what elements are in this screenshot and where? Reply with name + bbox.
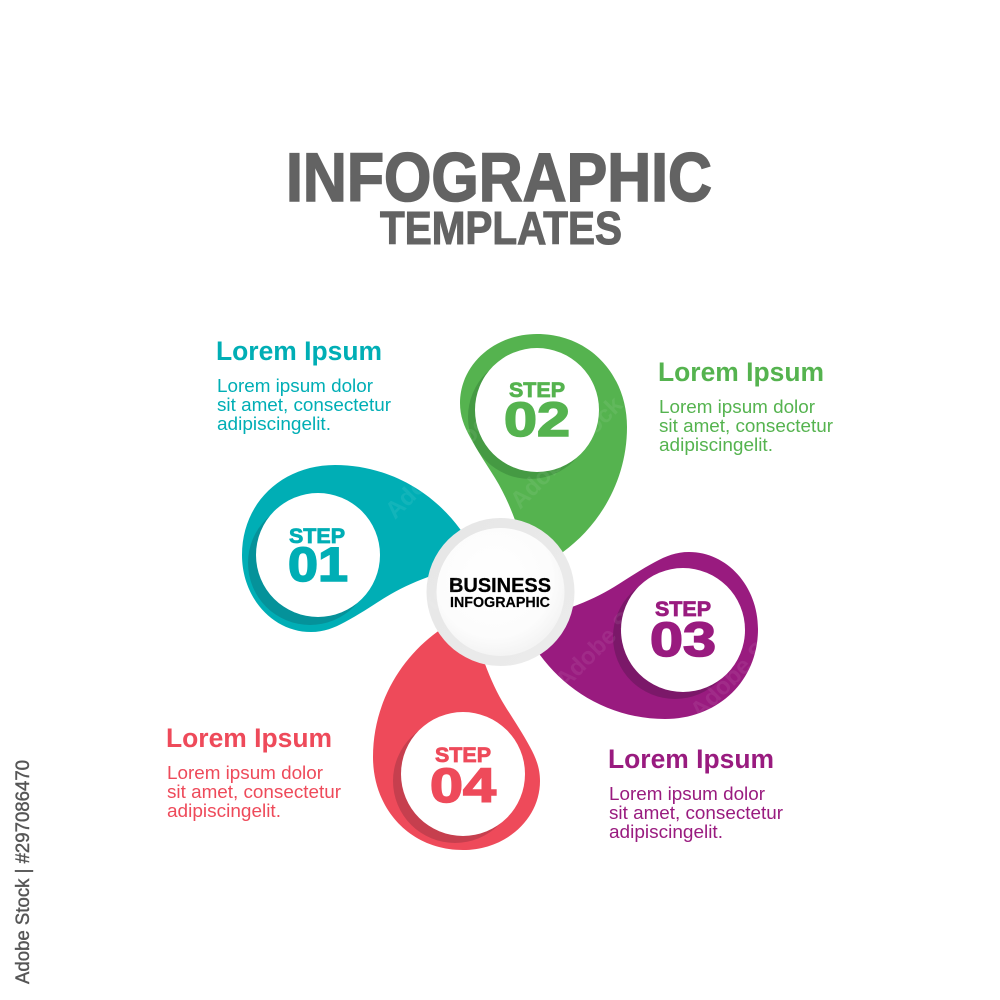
watermark: Adobe Stock bbox=[505, 391, 628, 514]
text block: step 01: sit amet, consectetur bbox=[217, 394, 391, 415]
text block: step 02 bbox=[658, 357, 833, 455]
petal: step 03: STEP bbox=[655, 597, 711, 621]
petal: step 01: 01 bbox=[288, 539, 348, 592]
text block: step 02: Lorem Ipsum bbox=[658, 357, 824, 387]
text block: step 04: Lorem Ipsum bbox=[166, 723, 332, 753]
petal: step 04: STEP bbox=[435, 743, 491, 767]
watermark: Adobe Stock bbox=[685, 601, 808, 724]
text block: step 03: Lorem Ipsum bbox=[608, 744, 774, 774]
petal: step 02: 02 bbox=[504, 394, 570, 447]
text block: step 04: sit amet, consectetur bbox=[167, 781, 341, 802]
petal: step 01 bbox=[242, 465, 460, 632]
petal: step 02: STEP bbox=[509, 378, 565, 402]
text block: step 03: adipiscingelit. bbox=[609, 821, 723, 842]
centre hub: BUSINESS bbox=[449, 575, 551, 597]
title: INFOGRAPHIC bbox=[286, 139, 712, 216]
text block: step 01: Lorem ipsum dolor bbox=[217, 375, 373, 396]
watermark bbox=[350, 391, 808, 724]
petal: step 04 bbox=[373, 632, 540, 850]
text block: step 01: adipiscingelit. bbox=[217, 413, 331, 434]
petal: step 03: 03 bbox=[650, 614, 716, 667]
centre hub bbox=[426, 518, 574, 666]
stock id label: Adobe Stock | #297086470 bbox=[13, 760, 34, 984]
petal: step 01: STEP bbox=[289, 524, 345, 548]
text block: step 04: adipiscingelit. bbox=[167, 800, 281, 821]
text block: step 02: Lorem ipsum dolor bbox=[659, 396, 815, 417]
watermark: Adobe Stock bbox=[380, 401, 503, 524]
centre hub: INFOGRAPHIC bbox=[450, 594, 550, 611]
petal: step 02 bbox=[460, 334, 627, 552]
text block: step 03: Lorem ipsum dolor bbox=[609, 783, 765, 804]
title: TEMPLATES bbox=[380, 202, 622, 254]
petal: step 03 bbox=[540, 552, 758, 719]
text block: step 03 bbox=[608, 744, 783, 842]
text block: step 04 bbox=[166, 723, 341, 821]
text block: step 01: Lorem Ipsum bbox=[216, 336, 382, 366]
text block: step 01 bbox=[216, 336, 391, 434]
text block: step 04: Lorem ipsum dolor bbox=[167, 762, 323, 783]
petal: step 04: 04 bbox=[430, 760, 496, 813]
text block: step 02: sit amet, consectetur bbox=[659, 415, 833, 436]
watermark: Adobe Stock bbox=[550, 571, 673, 694]
text block: step 03: sit amet, consectetur bbox=[609, 802, 783, 823]
watermark: Adobe Stock bbox=[350, 561, 473, 684]
title bbox=[286, 139, 712, 254]
text block: step 02: adipiscingelit. bbox=[659, 434, 773, 455]
